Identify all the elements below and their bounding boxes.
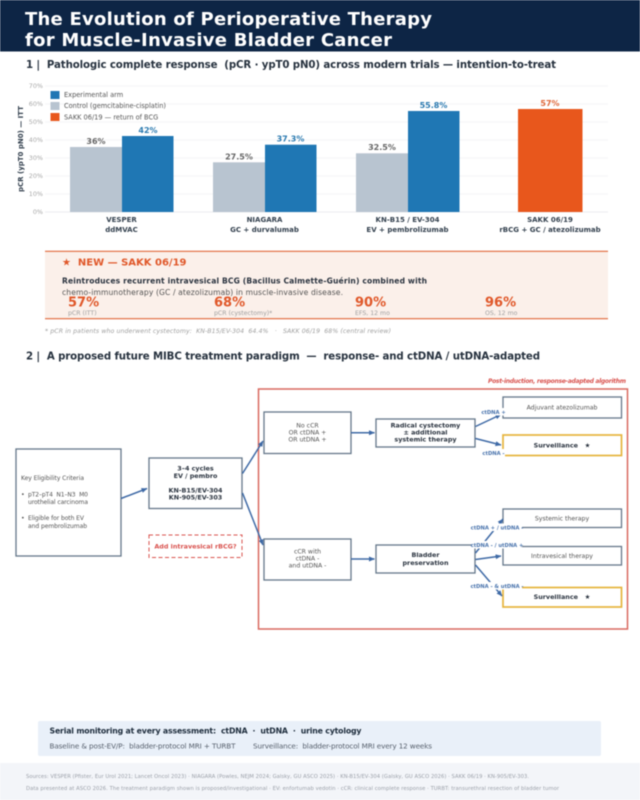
header banner with title: The Evolution of Perioperative Therapy (25, 9, 432, 30)
arrow: preservation to systemic (476, 519, 503, 553)
bars: VESPER: 36% (86, 137, 106, 146)
bars: VESPER: VESPER (106, 216, 137, 224)
box: key eligibility criteria: pT2–pT4 N1–N3 M0 (28, 492, 88, 498)
box: induction EV / pembro: EV / pembro (174, 472, 218, 480)
bar chart: pCR across trials: 50% (29, 118, 43, 126)
box: add intravesical rBCG (149, 535, 242, 558)
flow diagram: treatment paradigm (16, 378, 628, 629)
box: no cCR: No cCR (296, 422, 319, 430)
footer: sources (0, 763, 640, 800)
bar chart: pCR across trials: 70% (29, 82, 43, 90)
callout panel: NEW SAKK 06/19: ★ NEW — SAKK 06/19 (62, 258, 187, 268)
stat: pCR cystectomy (214, 296, 272, 317)
label: ctDNA positive utDNA negative: ctDNA + / utDNA - (471, 526, 523, 532)
label: ctDNA positive: ctDNA + (481, 410, 506, 416)
bar chart: pCR across trials: 60% (29, 100, 43, 108)
legend: Control (gemcitabine-cisplatin) (64, 102, 166, 110)
box: bladder preservation: preservation (402, 559, 449, 567)
post-induction algorithm frame (258, 378, 628, 629)
bars: NIAGARA: 27.5% (225, 152, 253, 162)
arrow: eligibility to induction (121, 488, 147, 498)
box: surveillance lower (503, 588, 622, 607)
bars: NIAGARA: 37.3% (277, 134, 304, 144)
callout panel: NEW SAKK 06/19: Reintroduces recurrent intravesical BCG (Bacillus Calmette-Guérin) combined with (62, 276, 427, 286)
box: key eligibility criteria: • (21, 492, 25, 498)
box: key eligibility criteria: and pembrolizumab (28, 523, 87, 530)
footer: sources: Sources: VESPER (Pfister, Eur Urol 2021; Lancet Oncol 2023) · NIAGARA (Powles, NEJM 2024; Galsky, GU ASCO 2025) · KN-B15/EV-304 (Galsky, GU ASCO 2026) · SAKK 06/19 · KN-905/EV-303. (26, 774, 529, 780)
bar chart: pCR across trials: 30% (29, 154, 43, 162)
panel: serial monitoring: Baseline & post-EV/P: bladder-protocol MRI + TURBT (50, 742, 236, 750)
box: cCR with negative DNA: ctDNA - (296, 556, 319, 562)
bar: SAKK 06/19: SAKK 06/19 (527, 216, 573, 224)
bars: KN-B15 / EV-304: 55.8% (420, 101, 447, 110)
box: radical cystectomy: ± additional (404, 428, 447, 436)
box: key eligibility criteria: Eligible for both EV (28, 515, 85, 522)
callout panel: NEW SAKK 06/19 (45, 251, 608, 319)
panel: serial monitoring (38, 721, 601, 756)
label: ctDNA negative: ctDNA - (482, 451, 505, 457)
stat: OS: 96% (485, 296, 516, 310)
bar: SAKK 06/19: rBCG + GC / atezolizumab (499, 226, 601, 234)
panel: serial monitoring: Serial monitoring at every assessment: ctDNA · utDNA · urine cytology (50, 726, 362, 736)
bars: KN-B15 / EV-304: KN-B15 / EV-304 (376, 216, 440, 224)
box: systemic therapy: Systemic therapy (535, 516, 589, 522)
arrow: induction to no cCR (242, 441, 263, 474)
box: no cCR (264, 412, 351, 454)
box: key eligibility criteria: • (21, 515, 25, 522)
box: cCR with negative DNA: and utDNA - (289, 562, 326, 570)
bars: KN-B15 / EV-304 (356, 101, 460, 234)
bars: VESPER (70, 126, 174, 234)
post-induction algorithm frame: Post-induction, response-adapted algorithm (488, 378, 626, 385)
box: surveillance upper (503, 435, 622, 456)
box: adjuvant atezolizumab: Adjuvant atezolizumab (527, 404, 598, 412)
box: bladder preservation: Bladder (411, 551, 440, 559)
bar chart: pCR across trials: 20% (29, 172, 43, 180)
box: surveillance lower: Surveillance ★ (534, 593, 591, 601)
box: induction EV / pembro (149, 458, 242, 508)
box: no cCR: OR utDNA + (288, 436, 327, 444)
legend: Experimental arm (64, 91, 123, 99)
arrow: cystectomy to surveillance (476, 438, 501, 445)
bar chart: pCR across trials (17, 82, 608, 234)
bar: SAKK 06/19: 57% (540, 99, 560, 108)
arrow: preservation to surveillance (476, 565, 502, 596)
bar chart: pCR across trials: 0% (33, 208, 43, 216)
stat: EFS: EFS, 12 mo (355, 310, 390, 317)
bar chart: pCR across trials: 10% (29, 190, 43, 198)
bars: NIAGARA: GC + durvalumab (230, 226, 299, 234)
box: intravesical therapy (503, 546, 622, 565)
box: radical cystectomy: systemic therapy (394, 436, 457, 444)
box: bladder preservation (376, 545, 475, 573)
panel: serial monitoring: Surveillance: bladder-protocol MRI every 12 weeks (253, 742, 432, 750)
box: cCR with negative DNA: cCR with (294, 548, 321, 556)
stat: EFS: 90% (355, 296, 386, 310)
legend: SAKK 06/19 — return of BCG (64, 114, 158, 122)
callout panel: NEW SAKK 06/19: chemo-immunotherapy (GC / atezolizumab) in muscle-invasive disease. (62, 288, 343, 297)
section 2 heading: 2 | A proposed future MIBC treatment paradigm — response- and ctDNA / utDNA-adapted (26, 352, 540, 362)
box: no cCR: OR ctDNA + (289, 430, 326, 436)
bars: KN-B15 / EV-304: 32.5% (368, 143, 396, 152)
bars: KN-B15 / EV-304: EV + pembrolizumab (366, 226, 449, 234)
bar chart: pCR across trials: pCR (ypT0 pN0) — ITT (17, 106, 25, 192)
arrow: induction to cCR (242, 493, 263, 545)
stat: OS (485, 296, 518, 317)
box: intravesical therapy: Intravesical therapy (531, 553, 593, 560)
bar: SAKK 06/19 (499, 99, 601, 234)
box: radical cystectomy (376, 419, 475, 447)
stat: pCR ITT (68, 296, 99, 317)
bars: NIAGARA (213, 134, 316, 234)
label: ctDNA and utDNA negative: ctDNA - & utDNA - (470, 584, 524, 590)
stat: OS: OS, 12 mo (485, 310, 518, 317)
stat: pCR ITT: 57% (68, 296, 99, 310)
box: induction EV / pembro: KN-905/EV-303 (169, 494, 222, 502)
arrow: preservation to intravesical (476, 556, 501, 560)
arrow: no cCR to cystectomy (351, 432, 374, 434)
box: key eligibility criteria: Key Eligibility Criteria (21, 475, 84, 482)
box: key eligibility criteria: urothelial carcinoma (28, 499, 88, 506)
stat: pCR ITT: pCR (ITT) (68, 310, 97, 317)
box: adjuvant atezolizumab (503, 397, 622, 418)
footnote: * pCR in patients who underwent cystectomy: KN-B15/EV-304 64.4% · SAKK 06/19 68% (central review) (45, 327, 391, 335)
box: key eligibility criteria (16, 449, 121, 556)
bar chart: pCR across trials: 40% (29, 136, 43, 144)
stat: EFS (355, 296, 390, 317)
box: add intravesical rBCG: Add intravesical rBCG? (154, 542, 237, 550)
bars: VESPER: 42% (138, 126, 158, 135)
header banner with title: for Muscle-Invasive Bladder Cancer (25, 30, 392, 51)
footer: sources: Data presented at ASCO 2026. The treatment paradigm shown is proposed/investigational · EV: enfortumab vedotin · cCR: clinical complete response · TURBT: transurethral resection of bladder tumor (26, 786, 560, 792)
label: ctDNA negative utDNA positive: ctDNA - / utDNA + (471, 543, 523, 549)
box: induction EV / pembro: KN-B15/EV-304 (169, 486, 223, 494)
bars: NIAGARA: NIAGARA (247, 216, 283, 224)
box: induction EV / pembro: 3–4 cycles (177, 464, 214, 472)
arrow: cystectomy to adjuvant (476, 414, 501, 426)
stat: pCR cystectomy: pCR (cystectomy)* (214, 310, 272, 317)
stat: pCR cystectomy: 68% (214, 296, 245, 310)
bars: VESPER: ddMVAC (105, 226, 138, 234)
section 1 heading: 1 | Pathologic complete response (pCR · ypT0 pN0) across modern trials — intention-to-treat (26, 60, 556, 71)
box: surveillance upper: Surveillance ★ (534, 442, 591, 450)
box: cCR with negative DNA (264, 539, 351, 580)
box: systemic therapy (503, 509, 622, 528)
arrow: cCR to preservation (351, 558, 374, 560)
header banner with title (0, 0, 640, 52)
box: radical cystectomy: Radical cystectomy (391, 422, 461, 430)
legend (50, 91, 166, 122)
